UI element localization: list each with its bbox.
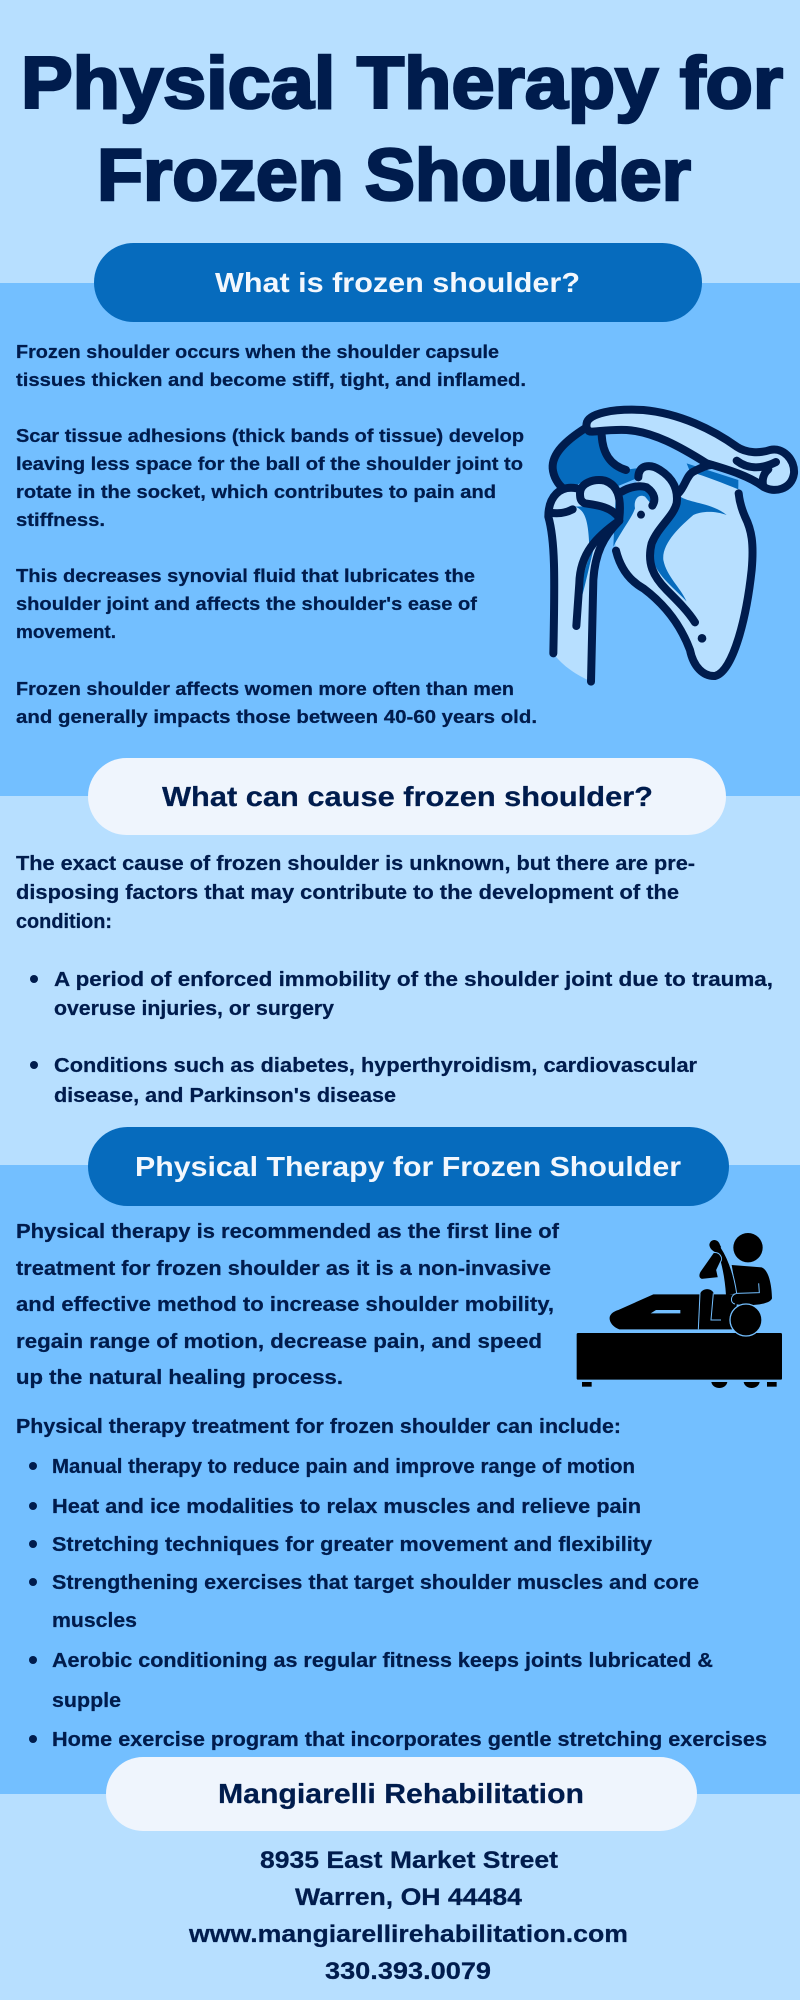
list: treatments: Heat and ice modalities to relax muscles and relieve pain [52, 1496, 641, 1518]
heading: what is frozen shoulder: What is frozen shoulder? [215, 267, 580, 298]
heading: physical therapy for frozen shoulder: Physical Therapy for Frozen Shoulder [135, 1151, 681, 1182]
list: causes: Conditions such as diabetes, hyperthyroidism, cardiovascular [54, 1055, 697, 1077]
text block: physical therapy intro: Physical therapy is recommended as the first line of [16, 1220, 559, 1243]
list: treatments: Home exercise program that incorporates gentle stretching exercises [52, 1729, 767, 1751]
text block: physical therapy intro: treatment for frozen shoulder as it is a non-invasive [16, 1257, 551, 1280]
title [21, 43, 783, 216]
list: treatments: supple [52, 1690, 121, 1712]
heading: Mangiarelli Rehabilitation [106, 1757, 697, 1831]
heading: Mangiarelli Rehabilitation: Mangiarelli Rehabilitation [218, 1778, 584, 1809]
text block: treatment intro: Physical therapy treatment for frozen shoulder can include: [16, 1416, 621, 1438]
contact details: Warren, OH 44484 [295, 1884, 523, 1911]
heading: physical therapy for frozen shoulder [88, 1127, 729, 1206]
text block: what is frozen shoulder: leaving less space for the ball of the shoulder joint to [16, 453, 523, 474]
contact details: 330.393.0079 [325, 1958, 491, 1985]
text block: causes intro: disposing factors that may contribute to the development of the [16, 882, 679, 904]
list: treatments [29, 1456, 767, 1751]
text block: what is frozen shoulder: Frozen shoulder occurs when the shoulder capsule [16, 341, 499, 362]
list: treatments: Strengthening exercises that target shoulder muscles and core [52, 1572, 699, 1594]
text block: what is frozen shoulder [16, 341, 537, 727]
list: treatments: Aerobic conditioning as regular fitness keeps joints lubricated & [52, 1650, 713, 1672]
text block: physical therapy intro [16, 1220, 559, 1389]
text block: what is frozen shoulder: and generally impacts those between 40-60 years old. [16, 706, 537, 727]
list: causes: disease, and Parkinson's disease [54, 1085, 396, 1107]
list: causes: A period of enforced immobility of the shoulder joint due to trauma, [54, 969, 773, 991]
text block: what is frozen shoulder: This decreases synovial fluid that lubricates the [16, 565, 475, 586]
title: Physical Therapy for [21, 43, 783, 124]
contact details [188, 1847, 628, 1985]
text block: causes intro: condition: [16, 911, 112, 933]
text block: what is frozen shoulder: stiffness. [16, 509, 105, 530]
title: Frozen Shoulder [97, 135, 691, 216]
text block: causes intro: The exact cause of frozen shoulder is unknown, but there are pre- [16, 853, 695, 875]
heading: what can cause frozen shoulder: What can cause frozen shoulder? [162, 781, 653, 812]
contact details: 8935 East Market Street [260, 1847, 558, 1874]
text block: what is frozen shoulder: shoulder joint and affects the shoulder's ease of [16, 593, 478, 614]
list: treatments: Manual therapy to reduce pain and improve range of motion [52, 1456, 635, 1478]
heading: what is frozen shoulder [94, 243, 702, 322]
text block: physical therapy intro: regain range of motion, decrease pain, and speed [16, 1330, 542, 1353]
text block: what is frozen shoulder: movement. [16, 621, 116, 642]
list: causes [30, 969, 773, 1107]
text block: causes intro [16, 853, 695, 933]
text block: what is frozen shoulder: tissues thicken and become stiff, tight, and inflamed. [16, 369, 526, 390]
list: treatments: muscles [52, 1610, 137, 1632]
icon: patient on treatment table [577, 1233, 782, 1388]
text block: physical therapy intro: and effective method to increase shoulder mobility, [16, 1293, 554, 1316]
text block: physical therapy intro: up the natural healing process. [16, 1366, 343, 1389]
icon: shoulder joint anatomy [548, 410, 794, 682]
text block: what is frozen shoulder: Frozen shoulder affects women more often than men [16, 678, 514, 699]
heading: what can cause frozen shoulder [88, 758, 726, 835]
contact details: www.mangiarellirehabilitation.com [188, 1921, 628, 1948]
text block: what is frozen shoulder: rotate in the socket, which contributes to pain and [16, 481, 496, 502]
list: causes: overuse injuries, or surgery [54, 998, 335, 1020]
text block: what is frozen shoulder: Scar tissue adhesions (thick bands of tissue) develop [16, 425, 524, 446]
list: treatments: Stretching techniques for greater movement and flexibility [52, 1534, 653, 1556]
